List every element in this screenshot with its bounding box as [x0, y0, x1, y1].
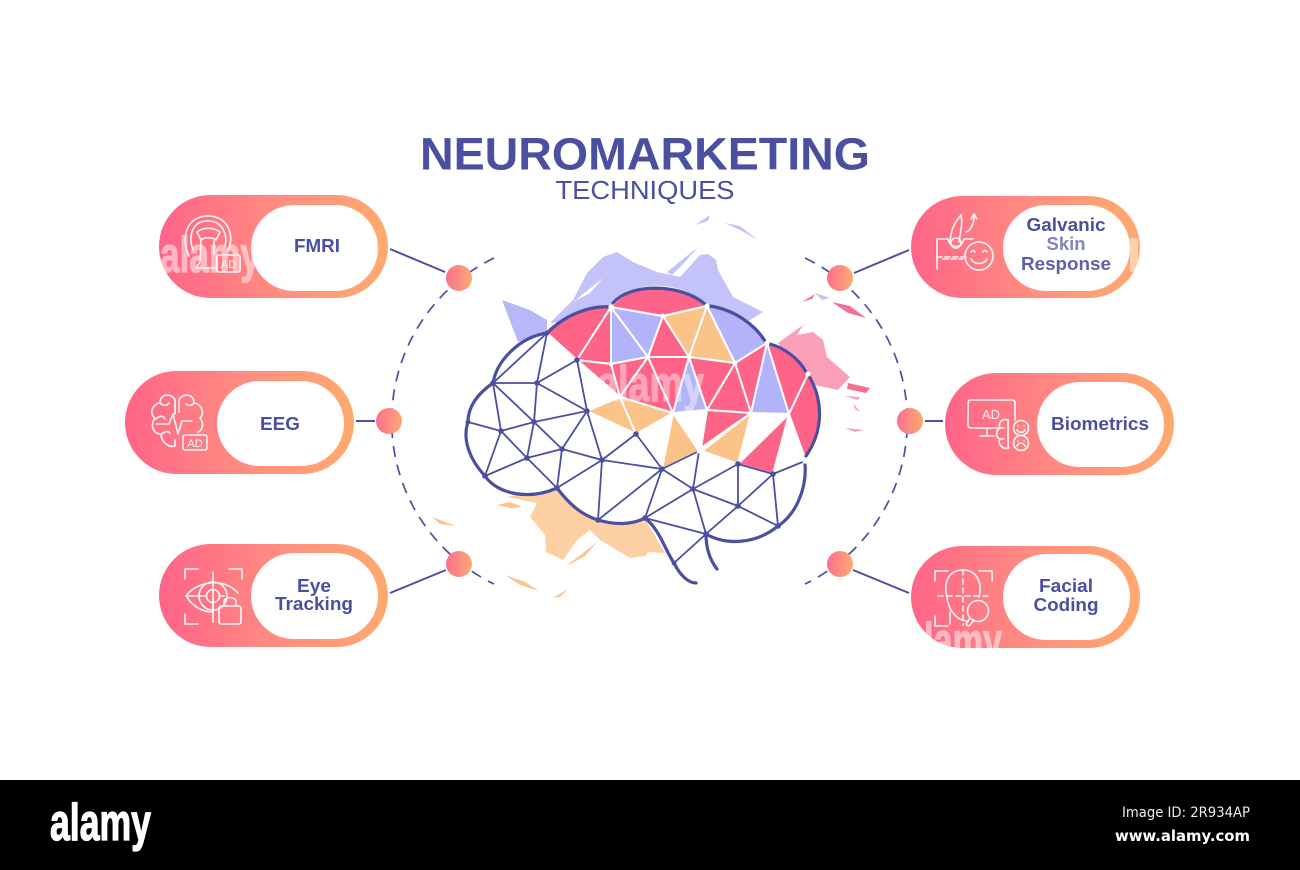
- navy nodes: [466, 330, 781, 566]
- label: Facial: [1039, 576, 1093, 596]
- footer bar: [0, 780, 1300, 870]
- footer logo: alamy: [50, 794, 151, 852]
- label: [275, 576, 353, 614]
- icon: MRI scanner with AD: [185, 216, 240, 272]
- pill body: [911, 546, 1140, 648]
- pill body: [125, 371, 354, 474]
- coloured mesh triangles: [547, 287, 820, 474]
- icon: skin with smiley: [937, 214, 993, 270]
- label: FMRI: [294, 236, 340, 256]
- title: NEUROMARKETING: [420, 128, 870, 180]
- label: EEG: [260, 414, 300, 434]
- label: [1034, 576, 1098, 615]
- lilac splash: [502, 215, 830, 342]
- pill inner: [1003, 205, 1130, 291]
- brain: [466, 287, 820, 583]
- node: [897, 408, 923, 434]
- node: [446, 551, 472, 577]
- pill inner: [1037, 382, 1164, 467]
- icon: brain with AD: AD: [187, 438, 203, 450]
- icon: eye with bag: [185, 569, 242, 624]
- pill inner: [251, 205, 378, 291]
- watermark patch: [1130, 238, 1138, 272]
- icon: monitor, brain, faces: [968, 400, 1028, 450]
- watermark: alamy: [905, 613, 1002, 669]
- label: Skin: [1046, 234, 1086, 254]
- icon: face scan with magnifier: [935, 570, 992, 626]
- dashed orbit arcs: [392, 258, 907, 584]
- navy mesh lines: [468, 333, 805, 563]
- left pill: FMRI: [159, 195, 472, 298]
- label: Coding: [1034, 595, 1098, 615]
- image id: Image ID: 2R934AP: [1122, 805, 1250, 821]
- right pill: Galvanic Skin Response: [827, 196, 1140, 298]
- connector: [853, 570, 909, 593]
- pill body: [945, 373, 1174, 475]
- label: Tracking: [275, 594, 353, 614]
- label: Biometrics: [1051, 414, 1149, 434]
- connector: [854, 250, 909, 273]
- brain base fill: [466, 287, 820, 541]
- connector: [390, 249, 445, 272]
- brain outline: [466, 288, 820, 583]
- pill body: [159, 195, 388, 298]
- node: [446, 265, 472, 291]
- connector: [925, 420, 943, 422]
- watermark: alamy: [160, 227, 260, 283]
- white nodes: [608, 303, 811, 464]
- pill body: [911, 196, 1140, 298]
- node: [827, 551, 853, 577]
- pill body: [159, 544, 388, 647]
- watermark over brain: alamy: [597, 356, 704, 412]
- pink splash: [778, 294, 870, 432]
- label: Eye: [297, 576, 331, 596]
- subtitle: TECHNIQUES: [556, 177, 734, 205]
- node: [827, 265, 853, 291]
- label: Galvanic: [1026, 215, 1106, 235]
- left pill: EEG: [125, 371, 402, 474]
- icon: MRI scanner with AD: AD: [221, 259, 236, 271]
- left pill: Eye Tracking: [159, 544, 472, 647]
- label: [1021, 215, 1111, 274]
- connector: [356, 420, 375, 422]
- right pill: Facial Coding: [827, 546, 1140, 669]
- paint splashes behind brain: [432, 215, 870, 598]
- connector: [390, 570, 446, 593]
- node: [376, 408, 402, 434]
- right pill: Biometrics: [897, 373, 1174, 475]
- peach splash: [432, 485, 665, 598]
- label: Response: [1021, 254, 1111, 274]
- icon: brain with AD: [152, 395, 207, 450]
- icon: monitor, brain, faces: AD: [982, 407, 1000, 422]
- pill inner: [251, 553, 378, 639]
- pill inner: [1003, 554, 1130, 640]
- pill inner: [217, 381, 344, 466]
- site url: www.alamy.com: [1115, 827, 1250, 845]
